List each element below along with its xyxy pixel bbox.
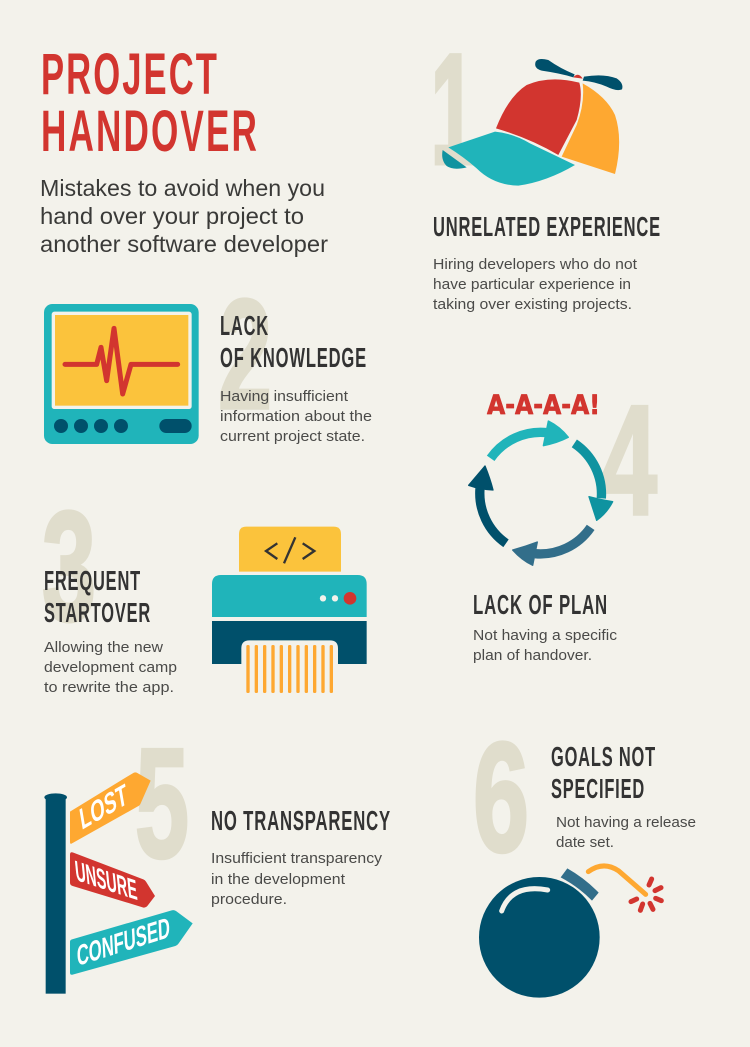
panel: no transparency <box>44 717 391 994</box>
icon: cycle arrows <box>469 421 613 565</box>
heading: FREQUENT <box>44 565 141 596</box>
title <box>41 42 259 164</box>
description: have particular experience in <box>433 276 631 293</box>
description: Not having a specific <box>473 627 618 644</box>
subtitle: hand over your project to <box>40 203 304 229</box>
description <box>473 627 618 664</box>
heading: LACK <box>220 310 269 341</box>
heading: SPECIFIED <box>551 773 645 804</box>
heading: OF KNOWLEDGE <box>220 342 367 373</box>
panel: lack of knowledge <box>44 268 372 445</box>
description: Hiring developers who do not <box>433 256 638 273</box>
heading <box>44 565 151 628</box>
icon: shredder <box>212 527 367 693</box>
description: in the development <box>211 871 346 888</box>
description <box>211 850 383 908</box>
description: information about the <box>220 408 372 425</box>
panel: goals not specified <box>473 711 696 998</box>
scream text: A-A-A-A! <box>487 390 600 421</box>
heading <box>551 741 656 804</box>
panel: unrelated experience <box>431 23 661 313</box>
heading: STARTOVER <box>44 597 151 628</box>
description: to rewrite the app. <box>44 679 174 696</box>
title: PROJECT <box>41 42 219 107</box>
icon: signpost: UNSURE <box>74 855 139 907</box>
number 4: 4 <box>601 374 657 548</box>
icon: bomb <box>479 866 661 998</box>
heading <box>220 310 367 373</box>
description: procedure. <box>211 891 287 908</box>
subtitle: Mistakes to avoid when you <box>40 175 325 201</box>
heading: NO TRANSPARENCY <box>211 805 391 836</box>
heading: LACK OF PLAN <box>473 589 608 620</box>
number 3: 3 <box>42 480 96 654</box>
heading: GOALS NOT <box>551 741 656 772</box>
icon: monitor <box>44 304 199 444</box>
icon: propeller cap <box>442 59 622 186</box>
description <box>220 388 372 445</box>
icon: signpost: LOST <box>77 778 130 837</box>
description: Not having a release <box>556 814 696 831</box>
description <box>44 639 177 696</box>
panel: lack of plan <box>469 374 657 664</box>
description: Having insufficient <box>220 388 349 405</box>
description: plan of handover. <box>473 647 592 664</box>
description <box>556 814 696 851</box>
description: date set. <box>556 834 614 851</box>
description: Allowing the new <box>44 639 163 656</box>
number 6: 6 <box>473 711 529 885</box>
title: HANDOVER <box>41 99 259 164</box>
number 1: 1 <box>431 23 475 197</box>
description: taking over existing projects. <box>433 296 632 313</box>
description <box>433 256 638 313</box>
description: Insufficient transparency <box>211 850 383 867</box>
subtitle <box>40 175 328 257</box>
number 5: 5 <box>135 717 189 891</box>
icon: signpost: CONFUSED <box>76 912 171 973</box>
number 2: 2 <box>218 268 272 442</box>
icon: signpost <box>44 772 193 994</box>
subtitle: another software developer <box>40 231 328 257</box>
description: current project state. <box>220 428 365 445</box>
description: development camp <box>44 659 177 676</box>
panel: frequent startover <box>42 480 367 696</box>
